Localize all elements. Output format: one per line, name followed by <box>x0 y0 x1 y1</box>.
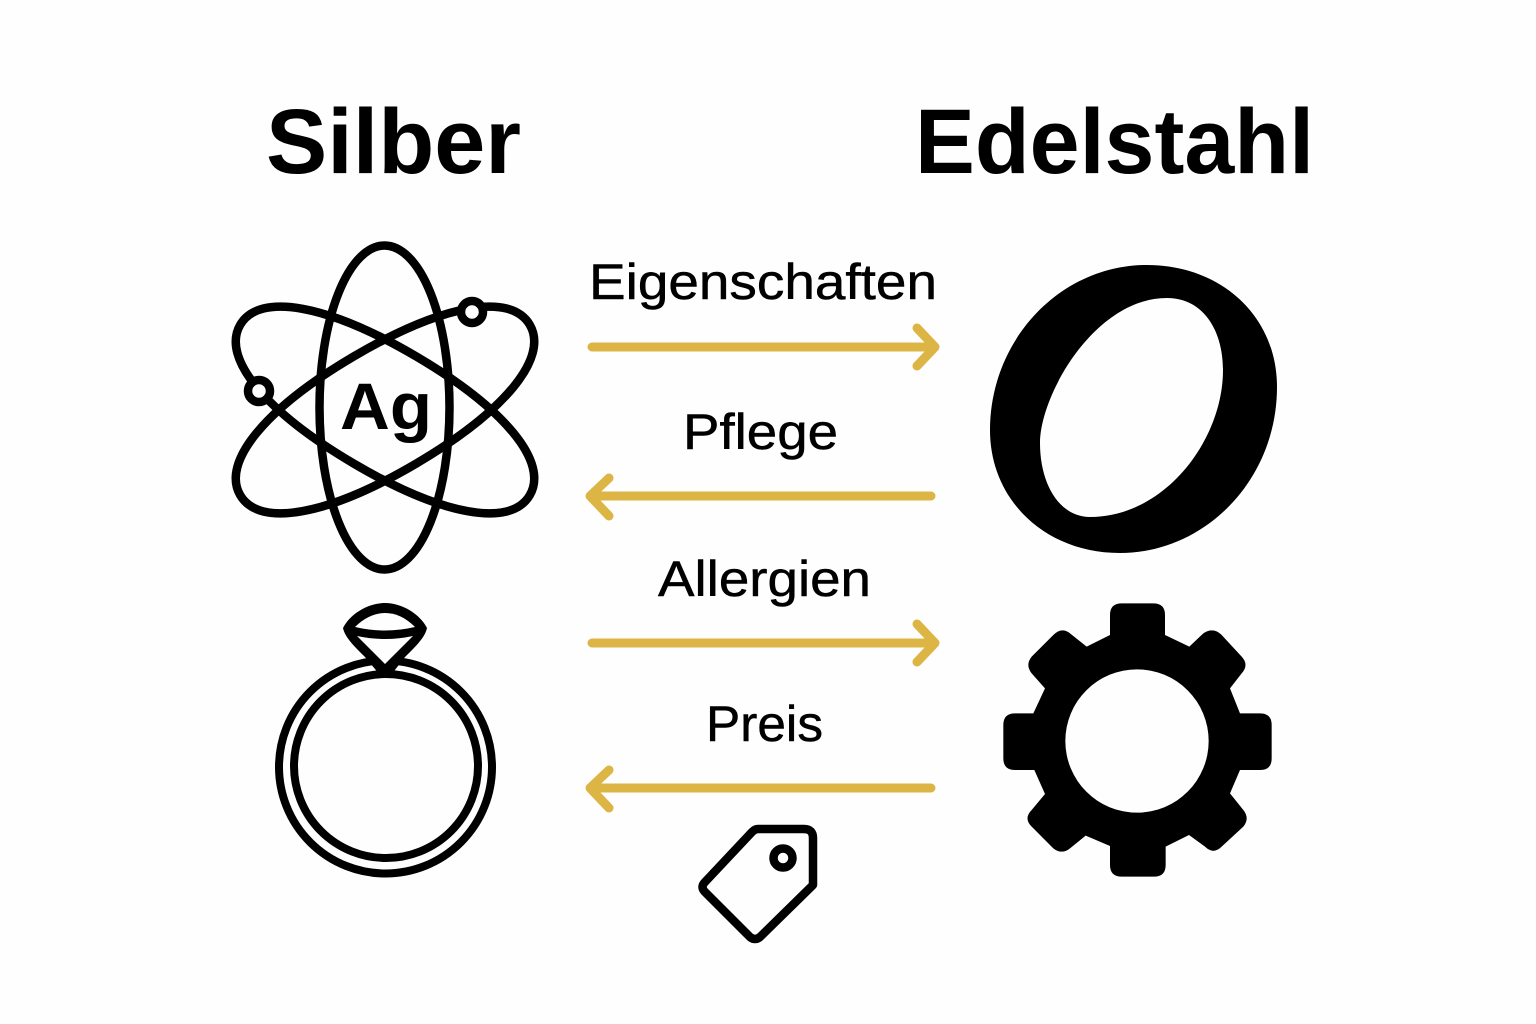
icon: steel ring <box>990 265 1277 553</box>
label: Pflege: Pflege <box>683 404 838 460</box>
icon: silver atom <box>209 246 561 570</box>
icon: price tag <box>702 829 813 939</box>
heading: Silber: Silber <box>266 91 521 193</box>
arrow: right, Eigenschaften <box>592 328 935 366</box>
arrow: left, Preis <box>590 770 931 808</box>
icon: silver atom: Ag <box>340 369 432 443</box>
icon: gear <box>1003 603 1272 877</box>
arrow: left, Pflege <box>590 478 931 516</box>
arrow: right, Allergien <box>592 624 935 662</box>
label: Allergien: Allergien <box>658 551 871 607</box>
icon: diamond ring <box>279 603 492 874</box>
label: Preis: Preis <box>706 696 823 752</box>
label: Eigenschaften: Eigenschaften <box>589 254 937 310</box>
heading: Edelstahl: Edelstahl <box>915 91 1314 193</box>
